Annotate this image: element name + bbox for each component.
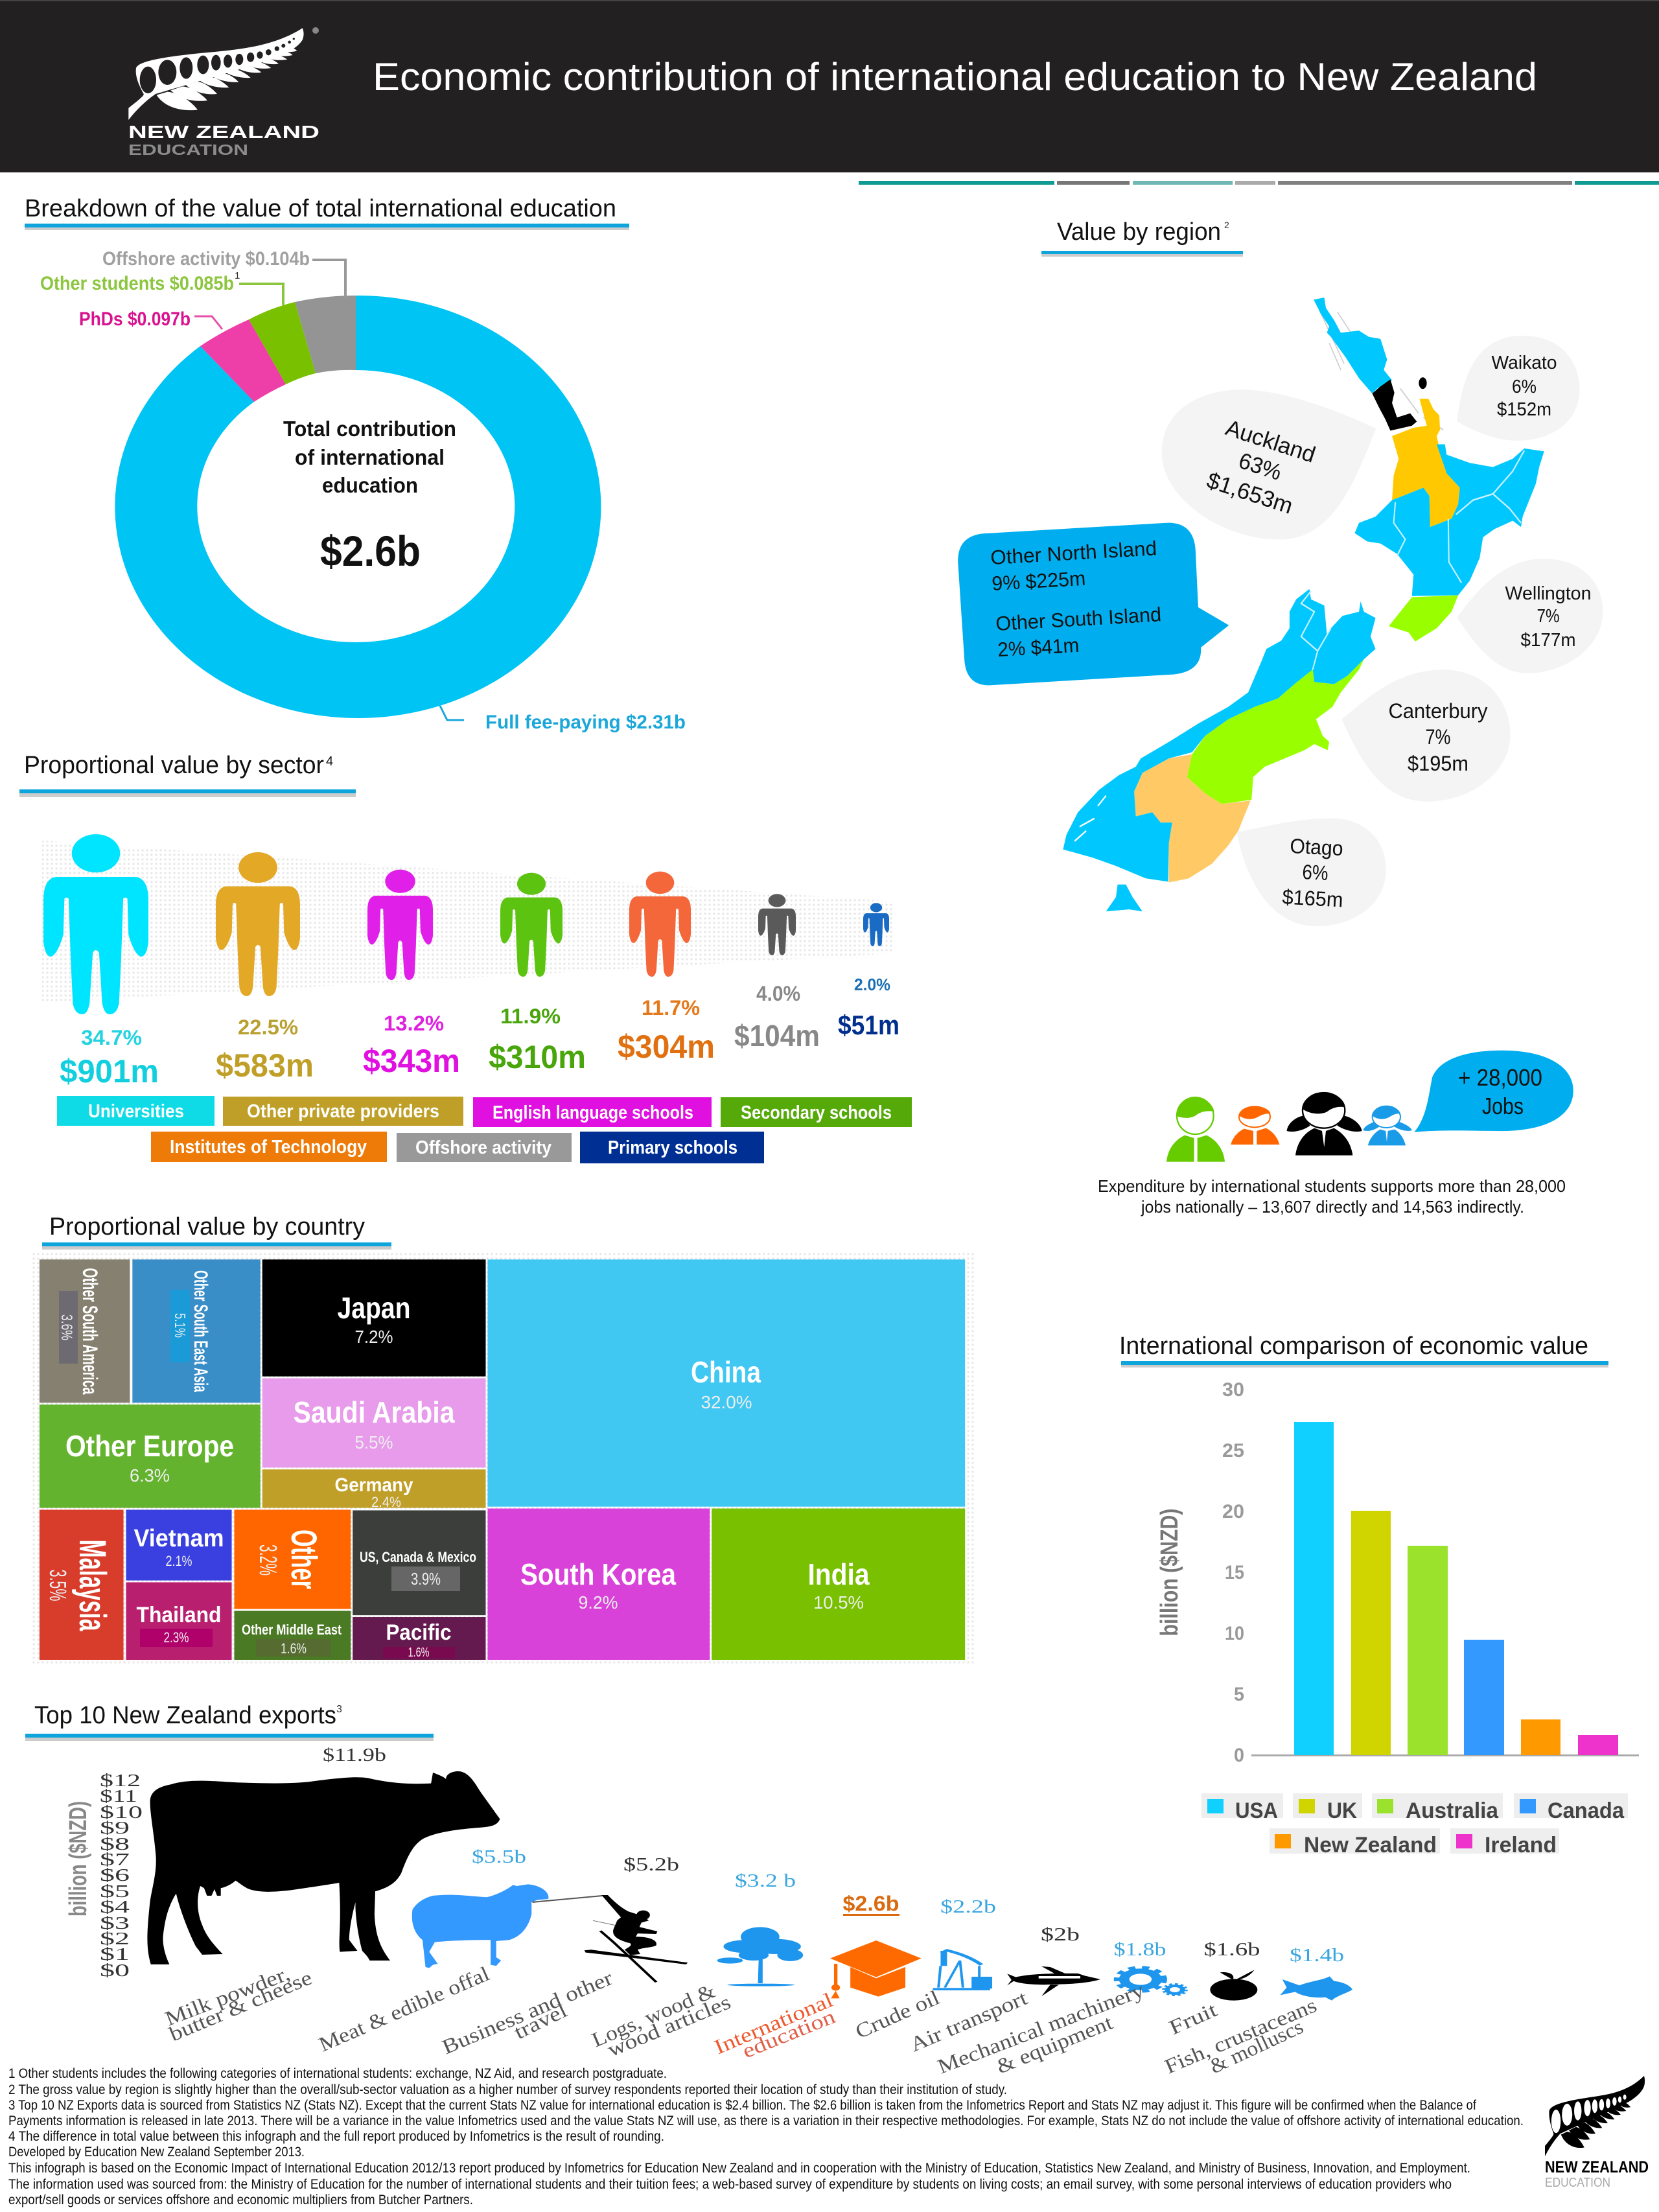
panel: international comparison xyxy=(1119,1333,1639,1857)
tile labels: South Korea xyxy=(520,1557,676,1591)
tile labels: 1.6% xyxy=(408,1646,430,1660)
export category labels: butter & cheese xyxy=(166,1966,315,2045)
export icons: large animals xyxy=(147,1771,688,1982)
export category labels: & molluscs xyxy=(1206,2014,1306,2078)
bar chart: 20 xyxy=(1222,1501,1244,1522)
export category labels: International xyxy=(711,1988,836,2058)
bar chart xyxy=(1156,1379,1639,1766)
export category labels: travel xyxy=(510,1998,570,2043)
text: Otago: Otago xyxy=(1290,834,1343,860)
tile labels: Other xyxy=(284,1530,325,1589)
sector percentages and values: $901m xyxy=(60,1053,159,1089)
y axis: $5 xyxy=(100,1881,130,1901)
text: Otago: 6% xyxy=(1302,860,1328,885)
chart legend xyxy=(1201,1793,1628,1857)
sector legend chips xyxy=(57,1096,912,1163)
export category labels: wood articles xyxy=(604,1990,734,2061)
footnotes: 3 Top 10 NZ Exports data is sourced from Statistics NZ (Stats NZ). Except that the current Stats NZ value for international education is $2.4 billion. The $2.6 billion is taken from the Infometrics Report and Stats NZ may adjust it. This figure will be confirmed when the Balance of xyxy=(8,2098,1476,2113)
chart legend: New Zealand xyxy=(1304,1833,1437,1857)
export values: $2b xyxy=(1041,1924,1080,1945)
export values: $1.8b xyxy=(1113,1939,1166,1960)
other islands callout bubble xyxy=(958,523,1229,685)
text: other north and south island: Other South Island xyxy=(995,603,1162,635)
text: Auckland: $1,653m xyxy=(1203,467,1296,519)
footer logo xyxy=(1545,2076,1649,2190)
title: Economic contribution of international education to New Zealand xyxy=(373,55,1537,99)
icon: tree xyxy=(717,1927,803,1986)
region bubbles xyxy=(1162,336,1603,926)
text: Waikato xyxy=(1492,353,1557,420)
export values: $5.5b xyxy=(472,1846,526,1867)
icon: fish xyxy=(1280,1976,1352,2001)
tile labels: Germany xyxy=(334,1474,413,1496)
export category labels: Fish, crustaceans xyxy=(1161,1993,1320,2078)
export values: $2.6b xyxy=(842,1892,899,1915)
tile labels: 32.0% xyxy=(701,1392,752,1412)
y axis: $8 xyxy=(100,1834,130,1854)
tile labels: 3.6% xyxy=(58,1314,75,1340)
tile labels: 2.1% xyxy=(166,1553,192,1569)
export values xyxy=(323,1745,1344,1966)
text: Auckland: 63% xyxy=(1236,448,1284,485)
dotted backdrop xyxy=(42,841,893,1003)
y axis: billion ($NZD) xyxy=(65,1801,92,1916)
panel: proportional value by country xyxy=(32,1213,974,1664)
callout: full fee-paying xyxy=(440,706,686,733)
sector legend chips: English language schools xyxy=(493,1102,693,1123)
heading: value by region: Value by region xyxy=(1057,218,1221,246)
panel: top 10 exports xyxy=(25,1702,1352,2078)
icon: apple xyxy=(1210,1970,1257,2001)
tile labels: Saudi Arabia xyxy=(293,1395,455,1429)
tile labels: 1.6% xyxy=(281,1640,307,1657)
bar chart: 15 xyxy=(1225,1562,1244,1583)
heading: breakdown: Breakdown of the value of total international education xyxy=(25,195,616,222)
treemap tiles xyxy=(40,1259,965,1660)
tile labels: 5.1% xyxy=(172,1313,189,1338)
text: Waikato: 6% xyxy=(1512,377,1537,397)
heading: sector: Proportional value by sector xyxy=(24,752,324,779)
jobs description: jobs nationally – 13,607 directly and 14,563 indirectly. xyxy=(1141,1197,1524,1217)
bubble text: Jobs xyxy=(1482,1093,1524,1119)
callout: full fee-paying: Full fee-paying $2.31b xyxy=(485,712,686,733)
export values: $2.2b xyxy=(940,1896,996,1917)
icon: gears xyxy=(1117,1968,1186,1996)
tile labels: 7.2% xyxy=(355,1327,393,1347)
text: other north and south island: Other North Island xyxy=(990,537,1157,569)
export category labels: Crude oil xyxy=(852,1985,943,2043)
sector percentages and values: 34.7% xyxy=(81,1026,142,1049)
footnotes: Developed by Education New Zealand September 2013. xyxy=(8,2145,305,2160)
tile labels: China xyxy=(691,1355,761,1389)
sector percentages and values: $51m xyxy=(838,1010,899,1040)
footnotes: The information used was sourced from: the Ministry of Education for the number of international students and their tuition fees; a web-based survey of expenditure by students on living costs; an email survey, with some personal interviews of education providers who xyxy=(8,2177,1452,2192)
panel: proportional value by sector xyxy=(19,752,912,1163)
footnotes: export/sell goods or services offshore and economic multipliers from Butcher Partners. xyxy=(8,2193,473,2207)
y axis: $0 xyxy=(100,1961,130,1980)
bubble text xyxy=(1458,1064,1542,1119)
panel: top 10 exports: 3 xyxy=(336,1704,342,1715)
export icons: small items xyxy=(717,1927,1352,2001)
sector percentages and values: 11.7% xyxy=(642,996,700,1019)
bar chart: 0 xyxy=(1234,1745,1244,1766)
sector percentages and values: 2.0% xyxy=(854,975,890,994)
donut centre text: $2.6b xyxy=(320,527,421,575)
icon: graduation cap xyxy=(830,1940,922,1998)
text: Wellington: Wellington xyxy=(1505,583,1592,604)
text: Wellington: 7% xyxy=(1537,606,1559,627)
sector percentages and values: $304m xyxy=(618,1029,715,1065)
footnotes: Payments information is released in late 2013. There will be a variance in the value Infometrics used and the value Stats NZ will use, as there is a variation in their respective methodologies. For example, Stats NZ do not include the value of offshore activity of international education. xyxy=(8,2113,1524,2128)
text: Otago: $165m xyxy=(1282,885,1343,911)
jobs description xyxy=(1098,1176,1566,1217)
text: other north and south island: 9% $225m xyxy=(991,567,1086,595)
tile labels: Pacific xyxy=(386,1620,451,1645)
tile labels xyxy=(45,1268,870,1660)
tile labels: Other South America xyxy=(78,1268,102,1395)
sector legend chips: Primary schools xyxy=(608,1137,737,1158)
tile labels: Vietnam xyxy=(133,1525,224,1552)
sector legend chips: Offshore activity xyxy=(415,1137,551,1158)
callout: offshore activity xyxy=(102,248,345,297)
footer logo: EDUCATION xyxy=(1545,2176,1610,2190)
tile labels: Other Europe xyxy=(65,1429,234,1463)
text: Otago xyxy=(1282,834,1343,911)
tile labels: Japan xyxy=(337,1291,411,1325)
y axis: $10 xyxy=(100,1802,143,1822)
export category labels: Air transport xyxy=(907,1986,1031,2056)
export category labels: Milk powder, xyxy=(162,1961,293,2031)
sector percentages and values: 4.0% xyxy=(756,982,800,1005)
tile labels: India xyxy=(807,1557,870,1591)
donut centre text: education xyxy=(322,473,418,497)
sector legend chips: Secondary schools xyxy=(741,1102,892,1123)
y axis: $3 xyxy=(100,1913,130,1933)
text: Canterbury: 7% xyxy=(1426,725,1450,749)
tile labels: 9.2% xyxy=(578,1592,618,1612)
sector legend chips: Universities xyxy=(88,1101,184,1122)
text: Canterbury xyxy=(1388,699,1488,775)
footnotes: 4 The difference in total value between this infograph and the full report produced by Infometrics is the result of rounding. xyxy=(8,2129,664,2144)
icon: sheep xyxy=(412,1884,548,1968)
tile labels: Other South East Asia xyxy=(190,1270,211,1392)
callout: PhDs: PhDs $0.097b xyxy=(79,309,191,330)
text: Wellington xyxy=(1505,583,1592,651)
callout: other students: 1 xyxy=(235,270,240,281)
footnotes: 2 The gross value by region is slightly higher than the overall/sub-sector valuation as a higher number of survey respondents reported their location of study than their institution of study. xyxy=(8,2082,1007,2097)
text: Canterbury: $195m xyxy=(1408,752,1468,775)
jobs description: Expenditure by international students supports more than 28,000 xyxy=(1098,1176,1566,1196)
person icons scaled by sector xyxy=(43,834,889,1014)
bar chart: billion ($NZD) xyxy=(1156,1509,1183,1636)
tile labels: Other Middle East xyxy=(242,1622,342,1638)
y axis: $7 xyxy=(100,1850,130,1869)
icon: black person xyxy=(1287,1093,1362,1156)
text: Waikato: $152m xyxy=(1497,399,1551,420)
text: Auckland xyxy=(1203,415,1319,519)
text: Auckland: Auckland xyxy=(1223,415,1319,468)
y axis: $9 xyxy=(100,1818,130,1837)
export values: $1.4b xyxy=(1290,1945,1344,1966)
panel: breakdown of total value xyxy=(25,195,686,733)
sector percentages and values: 13.2% xyxy=(384,1012,444,1035)
bubble text: + 28,000 xyxy=(1458,1064,1542,1091)
donut centre text xyxy=(283,417,456,575)
y axis: $12 xyxy=(100,1771,141,1790)
icon: oil pump xyxy=(933,1950,992,1990)
heading: international comparison: International comparison of economic value xyxy=(1119,1333,1588,1360)
sector legend chips: Institutes of Technology xyxy=(170,1137,367,1158)
bar chart: 30 xyxy=(1222,1379,1244,1401)
panel: value by region xyxy=(958,218,1603,926)
tile labels: US, Canada & Mexico xyxy=(360,1549,476,1565)
icon: orange person xyxy=(1231,1106,1279,1145)
header banner xyxy=(0,0,1659,172)
chart legend: Canada xyxy=(1548,1799,1625,1823)
speech bubble xyxy=(1414,1051,1573,1132)
y axis xyxy=(65,1771,143,1980)
chart legend: USA xyxy=(1235,1799,1278,1823)
panel: proportional value by sector: 4 xyxy=(326,754,333,769)
y axis: $6 xyxy=(100,1865,130,1885)
export category labels: Mechanical machinery xyxy=(934,1978,1147,2078)
footnotes xyxy=(8,2066,1524,2207)
y axis: $1 xyxy=(100,1944,130,1964)
callout: other students: Other students $0.085b xyxy=(40,273,234,294)
tile labels: Malaysia xyxy=(71,1540,113,1631)
export category labels: Fruit xyxy=(1165,1997,1220,2039)
panel: value by region: 2 xyxy=(1224,220,1229,230)
donut centre text: Total contribution xyxy=(283,417,456,441)
map and speech bubbles xyxy=(958,297,1603,926)
bar chart: 25 xyxy=(1222,1440,1244,1461)
tile labels: 2.4% xyxy=(371,1494,401,1510)
y axis: $2 xyxy=(100,1929,130,1948)
tile labels: 3.2% xyxy=(254,1544,281,1576)
y axis: $4 xyxy=(100,1897,130,1916)
export values: $5.2b xyxy=(623,1854,679,1875)
tile labels: 3.9% xyxy=(411,1569,441,1589)
export category labels: Logs, wood & xyxy=(588,1979,719,2051)
tile labels: Thailand xyxy=(136,1603,222,1627)
heading: country: Proportional value by country xyxy=(49,1213,365,1240)
bar chart: 10 xyxy=(1225,1623,1244,1644)
export category labels: & equipment xyxy=(993,2010,1116,2078)
sector percentages and values: 11.9% xyxy=(500,1005,561,1028)
tile labels: 2.3% xyxy=(163,1629,189,1646)
y axis: $11 xyxy=(100,1786,137,1806)
tile labels: 5.5% xyxy=(355,1432,393,1452)
donut centre text: of international xyxy=(295,445,445,469)
footnotes: 1 Other students includes the following categories of international students: exchange, NZ Aid, and research postgraduate. xyxy=(8,2066,667,2081)
text: Canterbury: Canterbury xyxy=(1388,699,1488,723)
tile labels: 6.3% xyxy=(130,1465,170,1485)
bar chart: 5 xyxy=(1234,1684,1244,1705)
chart legend: Australia xyxy=(1406,1799,1499,1823)
jobs people xyxy=(1166,1093,1412,1162)
tile labels: 3.5% xyxy=(45,1570,71,1601)
sector percentages and values: $343m xyxy=(363,1043,460,1079)
chart legend: Ireland xyxy=(1485,1833,1557,1857)
text: Waikato: Waikato xyxy=(1492,353,1557,373)
sector percentages and values: $104m xyxy=(734,1019,820,1053)
icon: blue person xyxy=(1363,1106,1412,1145)
sector percentages and values: $310m xyxy=(489,1039,586,1075)
export category labels: Meat & edible offal xyxy=(315,1962,493,2056)
text: Wellington: $177m xyxy=(1520,630,1576,651)
export values: $11.9b xyxy=(323,1745,386,1765)
panel: jobs xyxy=(1098,1051,1573,1217)
icon: plane xyxy=(1007,1966,1100,1996)
footnotes: This infograph is based on the Economic Impact of International Education 2012/13 report produced by Infometrics for Education New Zealand and in cooperation with the Ministry of Education, Statistics New Zealand, and Ministry of Business, Innovation, and Employment. xyxy=(8,2161,1470,2176)
text: other north and south island xyxy=(990,537,1162,661)
export values: $1.6b xyxy=(1204,1939,1260,1960)
icon: cow xyxy=(147,1771,500,1964)
icon: green person xyxy=(1166,1097,1225,1162)
sector percentages and values: $583m xyxy=(216,1047,314,1084)
icon: skier xyxy=(532,1895,688,1982)
map of New Zealand xyxy=(1063,297,1544,911)
donut chart xyxy=(115,296,601,718)
export values: $3.2 b xyxy=(735,1870,796,1891)
export category labels: Business and other xyxy=(439,1966,616,2058)
logo: New Zealand Education fern: NEW ZEALAND xyxy=(128,122,319,142)
logo: New Zealand Education fern xyxy=(128,27,319,158)
chart legend: UK xyxy=(1327,1799,1357,1823)
export category labels xyxy=(162,1961,1320,2078)
logo: New Zealand Education fern: EDUCATION xyxy=(128,141,248,158)
sector percentages and values xyxy=(60,975,899,1089)
tile labels: 10.5% xyxy=(813,1592,864,1612)
heading: top 10 exports: Top 10 New Zealand exports xyxy=(34,1702,336,1729)
sector legend chips: Other private providers xyxy=(247,1101,439,1122)
export category labels: education xyxy=(739,2005,839,2062)
callout: other students xyxy=(40,270,283,305)
callout: offshore activity: Offshore activity $0.104b xyxy=(102,248,310,270)
sector percentages and values: 22.5% xyxy=(238,1016,298,1039)
text: other north and south island: 2% $41m xyxy=(997,634,1080,661)
